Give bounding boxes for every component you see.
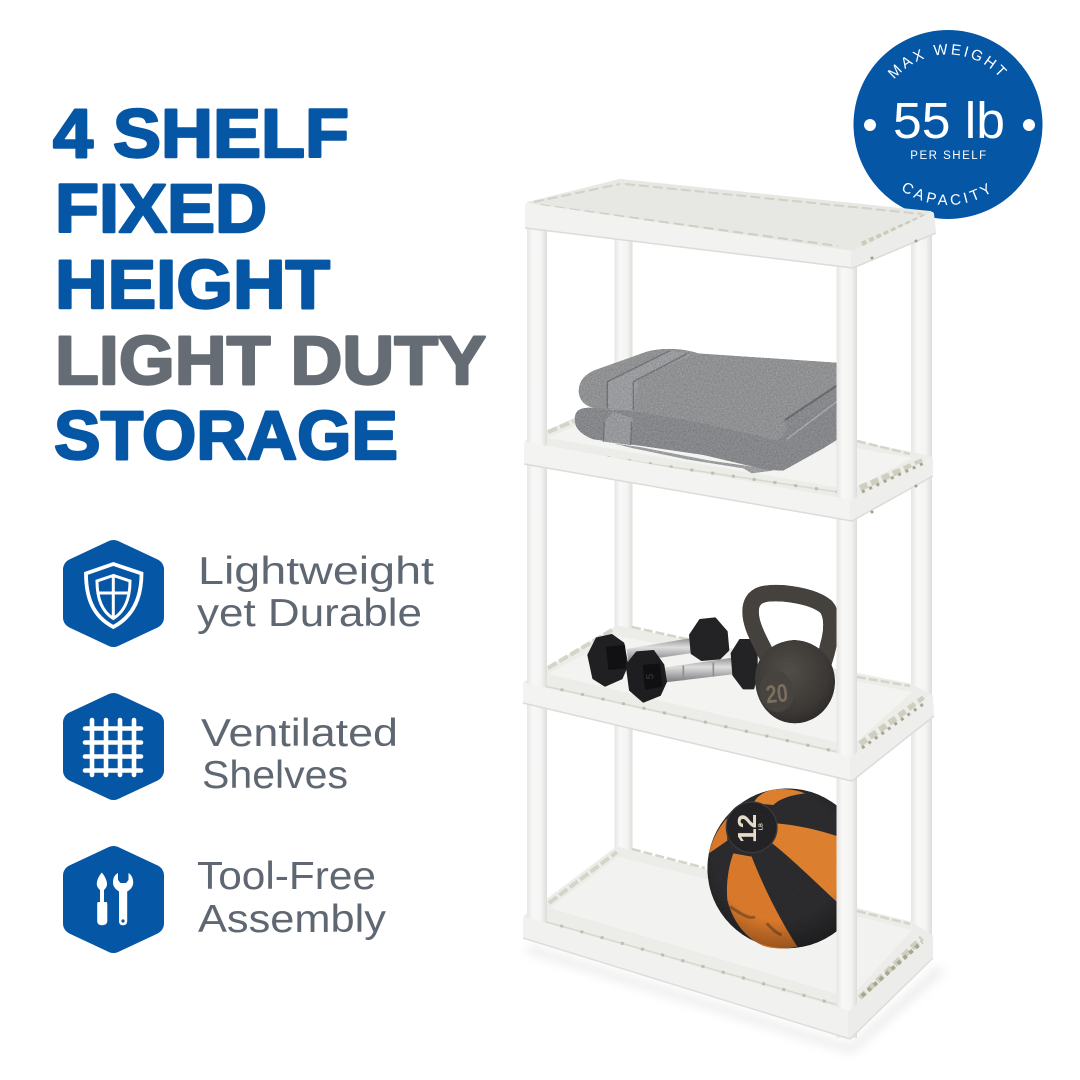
feature: tool-free assembly <box>74 855 387 942</box>
upper towel <box>579 349 837 441</box>
icon: tools in hexagon <box>74 857 153 942</box>
shelf 4 lip <box>523 919 933 1039</box>
lower towel <box>574 400 836 471</box>
badge: max weight: 55 lb <box>893 92 1005 149</box>
shelf 1 top <box>525 181 936 268</box>
title: 4 SHELF <box>53 95 349 172</box>
kettlebell body <box>755 640 835 723</box>
dumbbells <box>588 618 757 702</box>
text: ventilated shelves <box>201 712 398 797</box>
front left post <box>527 225 547 930</box>
floor shadow <box>525 945 944 1054</box>
text: tool-free assembly <box>197 855 387 941</box>
front dumbbell: 5 <box>644 674 656 680</box>
towel bands <box>607 350 692 411</box>
badge: max weight: MAX WEIGHT <box>888 44 1008 79</box>
title: LIGHT DUTY <box>55 322 486 399</box>
towels <box>575 349 837 473</box>
title: STORAGE <box>54 397 398 474</box>
title: HEIGHT <box>55 246 330 323</box>
icon: grid in hexagon <box>74 704 153 789</box>
bottom towel sheet <box>613 443 773 473</box>
text: ventilated shelves: Ventilated <box>201 712 398 755</box>
feature: lightweight yet durable <box>74 550 434 636</box>
badge: max weight: CAPACITY <box>902 182 989 206</box>
text: tool-free assembly: Assembly <box>198 898 387 941</box>
kettlebell handle <box>751 593 831 663</box>
feature: ventilated shelves <box>74 704 398 797</box>
rear dumbbell <box>588 618 728 686</box>
front right post <box>836 262 857 1038</box>
text: ventilated shelves: Shelves <box>202 754 348 797</box>
icon: shield in hexagon <box>74 551 153 636</box>
text: tool-free assembly: Tool-Free <box>197 855 376 898</box>
shelf 3 lip <box>523 685 934 781</box>
shelf 2 lip <box>524 444 933 521</box>
medicine ball: 12 <box>732 814 762 843</box>
medicine ball <box>707 788 836 949</box>
text: lightweight yet durable <box>197 550 434 635</box>
towel fold <box>783 385 837 427</box>
back posts <box>614 225 932 940</box>
badge: max weight: PER SHELF <box>910 150 988 162</box>
title: FIXED <box>55 170 267 247</box>
text: lightweight yet durable: Lightweight <box>198 550 434 593</box>
medicine ball: LB <box>759 823 765 830</box>
shelf 2 surface <box>526 398 931 501</box>
kettlebell: 20 <box>765 679 789 709</box>
badge: max weight <box>854 30 1042 219</box>
shelving unit <box>523 181 944 1054</box>
front dumbbell <box>627 640 757 702</box>
title <box>53 95 486 474</box>
text: lightweight yet durable: yet Durable <box>197 592 422 635</box>
kettlebell <box>751 593 835 723</box>
shelf 4 surface <box>525 848 931 1010</box>
shelf 3 surface <box>525 627 931 758</box>
